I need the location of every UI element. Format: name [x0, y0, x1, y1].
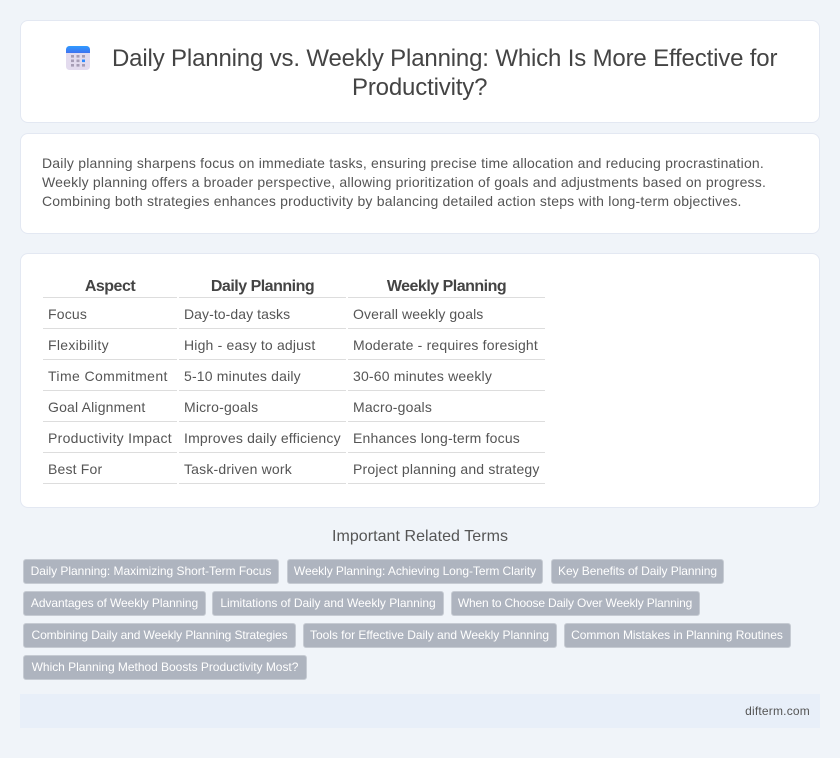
comparison table: [43, 278, 545, 484]
comparison table: Moderate - requires foresight: [353, 337, 538, 353]
comparison table: Overall weekly goals: [353, 306, 483, 322]
table header: Weekly Planning: [387, 278, 506, 295]
icon: calendar: [66, 46, 90, 70]
related term tags: Weekly Planning: Achieving Long-Term Clarity: [294, 564, 536, 578]
summary text: Daily planning sharpens focus on immediate tasks, ensuring precise time allocation and reducing procrastination.: [42, 155, 764, 171]
related term tags: [23, 559, 791, 680]
related term tags: Which Planning Method Boosts Productivity Most?: [32, 660, 298, 674]
summary text: [42, 155, 766, 209]
comparison table: 5-10 minutes daily: [184, 368, 301, 384]
summary text: Weekly planning offers a broader perspective, allowing prioritization of goals and adjustments based on progress.: [42, 174, 766, 190]
title: [112, 45, 778, 101]
related term tags: Limitations of Daily and Weekly Planning: [220, 596, 436, 610]
related term tags: Common Mistakes in Planning Routines: [571, 628, 783, 642]
related term tags: Tools for Effective Daily and Weekly Planning: [310, 628, 549, 642]
title: Daily Planning vs. Weekly Planning: Which Is More Effective for: [112, 45, 777, 72]
related term tags: When to Choose Daily Over Weekly Planning: [458, 596, 692, 610]
panel: comparison table: [20, 253, 820, 508]
title: Productivity?: [352, 74, 487, 101]
comparison table: Task-driven work: [184, 461, 292, 477]
related term tags: Combining Daily and Weekly Planning Strategies: [32, 628, 288, 642]
table header: [85, 278, 506, 295]
table header: Daily Planning: [211, 278, 314, 295]
comparison table: Flexibility: [48, 337, 109, 353]
related term tags: Key Benefits of Daily Planning: [558, 564, 717, 578]
comparison table: Productivity Impact: [48, 430, 172, 446]
footer: [20, 694, 820, 728]
panel: summary: [20, 133, 820, 234]
comparison table: High - easy to adjust: [184, 337, 315, 353]
summary text: Combining both strategies enhances productivity by balancing detailed action steps with long-term objectives.: [42, 193, 742, 209]
related term tags: Daily Planning: Maximizing Short-Term Focus: [31, 564, 271, 578]
comparison table: Macro-goals: [353, 399, 432, 415]
heading: related terms: Important Related Terms: [332, 528, 508, 545]
related term tags: Advantages of Weekly Planning: [31, 596, 198, 610]
comparison table: Project planning and strategy: [353, 461, 540, 477]
comparison table: Goal Alignment: [48, 399, 145, 415]
footer credit: difterm.com: [745, 704, 810, 718]
comparison table: Day-to-day tasks: [184, 306, 290, 322]
comparison table: Focus: [48, 306, 87, 322]
comparison table: Improves daily efficiency: [184, 430, 341, 446]
comparison table: Enhances long-term focus: [353, 430, 520, 446]
comparison table: 30-60 minutes weekly: [353, 368, 492, 384]
comparison table: Micro-goals: [184, 399, 258, 415]
comparison table: Best For: [48, 461, 102, 477]
comparison table: Time Commitment: [48, 368, 168, 384]
table header: Aspect: [85, 278, 135, 295]
header card: [20, 20, 820, 123]
